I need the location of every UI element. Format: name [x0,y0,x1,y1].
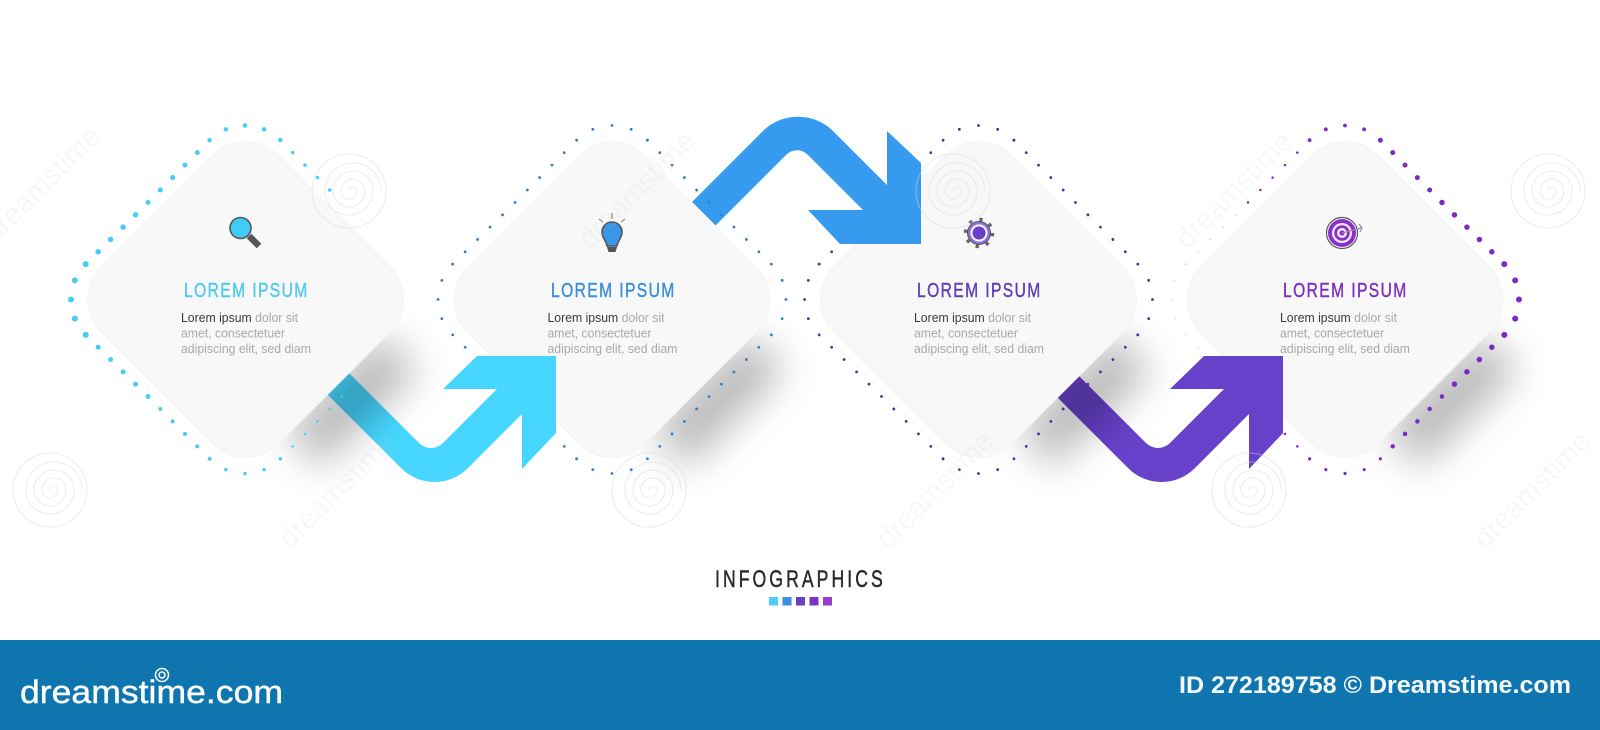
dotted outline [805,126,1152,473]
watermark text: dreamstime [870,425,1000,555]
panel: step 2 [438,126,786,473]
icon: magnifier [230,218,259,246]
dotted outline [1171,126,1519,473]
arrow: step 1 to step 2 [326,356,556,482]
watermark spirals [13,154,1585,527]
text block: amet, consectetuer [914,326,1018,340]
text block: Lorem ipsum dolor sit [548,311,665,325]
card shadow [286,334,418,468]
card [821,142,1136,457]
icon: logo spiral [156,668,168,682]
text block: adipiscing elit, sed diam [914,342,1044,356]
panel: step 1 [71,126,418,473]
card [88,142,403,457]
text block: Lorem ipsum dolor sit [1280,311,1398,325]
infographics label: INFOGRAPHICS [715,565,883,593]
text block [1280,311,1410,356]
text block: adipiscing elit, sed diam [1280,342,1410,356]
footer image id: ID 272189758 © Dreamstime.com [1179,672,1571,699]
heading: LOREM IPSUM [184,279,307,301]
card [1187,142,1503,457]
card shadow [1018,334,1152,468]
watermark text [0,120,1597,555]
dotted outline [438,126,786,473]
footer logo: dreamstime.com [20,674,283,710]
text block: amet, consectetuer [181,326,285,340]
text block: amet, consectetuer [548,326,652,340]
card shadow [652,334,785,468]
text block [548,311,678,356]
watermark text: dreamstime [1169,125,1299,255]
icon: gear [966,220,992,246]
heading: LOREM IPSUM [1283,279,1406,301]
arrow: step 2 to step 3 [691,117,921,244]
watermark text: dreamstime [272,425,402,555]
footer band [0,640,1600,730]
text block [914,311,1044,356]
text block: amet, consectetuer [1280,326,1384,340]
card [454,142,770,457]
heading: LOREM IPSUM [917,279,1040,301]
text block: Lorem ipsum dolor sit [181,311,299,325]
text block: adipiscing elit, sed diam [548,342,678,356]
panel: step 4 [1171,126,1519,473]
watermark text: dreamstime [1467,425,1597,555]
text block: Lorem ipsum dolor sit [914,311,1032,325]
text block: adipiscing elit, sed diam [181,342,311,356]
icon: target [1326,218,1362,248]
card shadow [1385,334,1518,468]
arrow: step 3 to step 4 [1053,356,1283,482]
watermark text: dreamstime [572,125,702,255]
dotted outline [71,126,404,473]
icon: light bulb [599,213,625,252]
panel: step 3 [805,126,1152,473]
colour squares [769,597,832,606]
text block [181,311,311,356]
heading: LOREM IPSUM [551,279,674,301]
